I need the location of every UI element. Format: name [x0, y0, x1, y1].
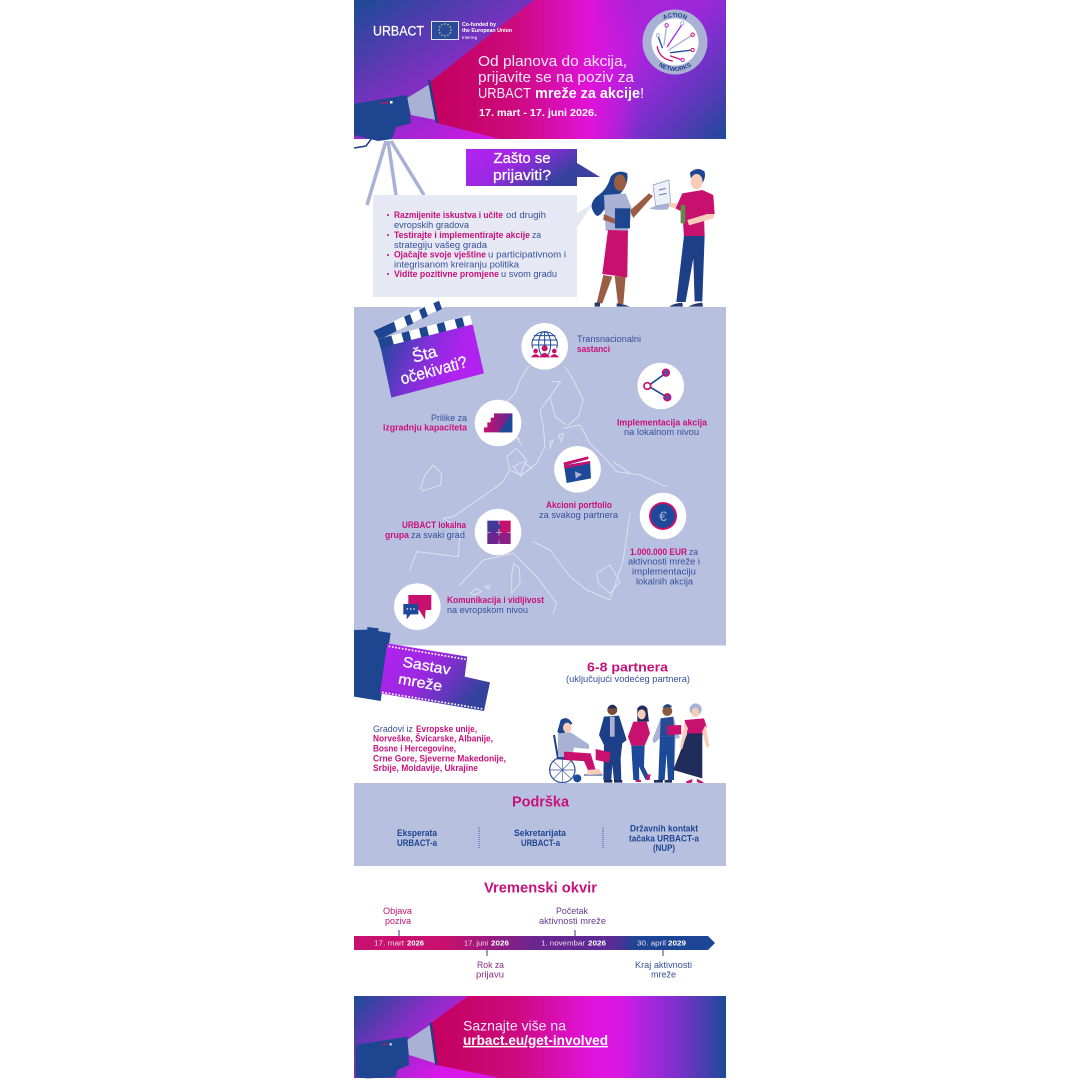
date: 1 November 2026: 1. novembar: [541, 938, 586, 947]
support: secretariat: [514, 828, 567, 848]
support: national contact points: Državnih kontakt: [630, 824, 698, 834]
item: communication: na evropskom nivou: [447, 605, 528, 615]
date: 17 June 2026: [464, 938, 509, 947]
support: experts: URBACT-a: [397, 838, 438, 848]
header title: prijavite se na poziv za: [478, 69, 635, 86]
reasons list: u participativnom i: [488, 250, 566, 260]
icon: stairs: [475, 400, 521, 446]
item: local group: grupa: [385, 530, 410, 540]
EU flag and co-funded text: [432, 22, 512, 40]
timeline bar: [354, 936, 715, 950]
milestone: network start: [539, 906, 606, 926]
icon: speech bubbles: [394, 583, 441, 630]
milestone: call launch: Objava: [383, 906, 412, 916]
eligible cities text: Evropske unije,: [416, 724, 477, 734]
heading: clapperboard: Šta: [410, 342, 440, 367]
item: transnational meetings: [521, 323, 641, 370]
milestone: deadline: prijavu: [476, 970, 504, 980]
date: 30 April 2029: [637, 938, 686, 947]
item: budget: implementaciju: [632, 566, 696, 576]
EU flag and co-funded text: Interreg: [462, 35, 477, 40]
item: capacity building: [383, 400, 521, 446]
map of Europe: [410, 367, 667, 613]
icon: euro coin: €: [659, 508, 667, 524]
eligible cities text: [373, 724, 506, 773]
date: 17 March 2026: 17. mart: [374, 938, 405, 947]
date: 1 November 2026: [541, 938, 606, 947]
date: 30 April 2029: 2029: [668, 938, 686, 947]
heading: why apply: prijaviti?: [493, 167, 551, 184]
reasons list: Razmijenite iskustva i učite: [394, 210, 503, 220]
support: secretariat: Sekretarijata: [514, 828, 567, 838]
reasons list: Testirajte i implementirajte akcije: [394, 230, 530, 240]
header title: !: [640, 85, 644, 102]
header title: mreže za akcije: [535, 85, 640, 102]
EU flag and co-funded text: the European Union: [462, 28, 512, 34]
item: implementation of actions: [617, 363, 708, 437]
item: action portfolio: Akcioni portfolio: [546, 500, 612, 510]
URBACT logo: URBACT: [373, 22, 424, 38]
heading: film roll: mreže: [397, 672, 443, 695]
call to action text: [463, 1018, 608, 1048]
icon: globe with people: [521, 323, 568, 370]
milestone: network end: Kraj aktivnosti: [635, 960, 692, 970]
reasons list: strategiju vašeg grada: [394, 240, 487, 250]
item: implementation of actions: Implementacija akcija: [617, 418, 708, 428]
header banner: [354, 0, 726, 139]
illustration: two people with document: [592, 169, 715, 307]
heading: why apply: Zašto se: [494, 150, 550, 167]
header title: URBACT: [478, 85, 531, 102]
spotlight beam: [430, 0, 726, 139]
panel: what to expect: [354, 298, 726, 646]
item: action portfolio: za svakog partnera: [539, 510, 618, 520]
item: action portfolio: [539, 446, 618, 520]
eligible cities text: Crne Gore, Sjeverne Makedonije,: [373, 754, 506, 764]
reasons list: Ojačajte svoje vještine: [394, 250, 486, 260]
milestone: deadline: Rok za: [477, 960, 504, 970]
eligible cities text: Norveške, Švicarske, Albanije,: [373, 733, 493, 744]
item: transnational meetings: sastanci: [577, 344, 610, 354]
support: experts: Eksperata: [397, 828, 438, 838]
item: budget: aktivnosti mreže i: [628, 556, 700, 566]
date: 30 April 2029: 30. april: [637, 938, 666, 947]
item: budget: [628, 493, 700, 586]
illustration: group of five people: [550, 703, 709, 784]
item: budget: za: [689, 547, 698, 557]
panel: support: [354, 783, 726, 866]
milestone: deadline: [476, 960, 504, 980]
support: national contact points: [629, 824, 700, 853]
heading: film roll: Sastav: [401, 655, 452, 679]
item: communication: Komunikacija i vidljivost: [447, 595, 544, 605]
heading: timeline: Vremenski okvir: [484, 880, 597, 897]
reasons list: integrisanom kreiranju politika: [394, 260, 519, 270]
milestone: network start: aktivnosti mreže: [539, 916, 606, 926]
call to action text: Saznajte više na: [463, 1018, 566, 1034]
header title: Od planova do akcija,: [478, 53, 627, 70]
spotlight beam: [431, 996, 640, 1078]
item: communication: [394, 583, 544, 630]
date: 17 June 2026: 17. juni: [464, 938, 488, 947]
partners count: [566, 660, 690, 684]
support: national contact points: (NUP): [653, 843, 675, 853]
header title: [478, 53, 644, 102]
partners count: (uključujući vodećeg partnera): [566, 674, 690, 684]
icon: small clapperboard: [554, 446, 601, 493]
item: local group: URBACT lokalna: [402, 520, 467, 530]
icon: film camera: [356, 1023, 436, 1078]
item: capacity building: Prilike za: [431, 413, 467, 423]
badge: action networks: [642, 10, 708, 74]
date: 17 March 2026: [374, 938, 424, 947]
reasons list: za: [532, 230, 541, 240]
date: 17 March 2026: 2026: [407, 938, 424, 947]
header dates: 17. mart - 17. juni 2026.: [479, 107, 597, 119]
item: transnational meetings: Transnacionalni: [577, 334, 641, 344]
icon: puzzle: [475, 509, 521, 555]
date: 1 November 2026: 2026: [588, 938, 606, 947]
milestone: network end: mreže: [651, 970, 676, 980]
icon: share nodes: [637, 363, 684, 409]
reasons list: evropskih gradova: [394, 220, 469, 230]
milestone: call launch: [383, 906, 412, 926]
item: local group: za svaki grad: [411, 530, 465, 540]
reasons list: od drugih: [506, 210, 546, 220]
support: national contact points: tačaka URBACT-a: [629, 834, 700, 844]
support: secretariat: URBACT-a: [521, 838, 561, 848]
item: local group: [385, 509, 521, 555]
heading: support: Podrška: [512, 794, 570, 811]
milestone: call launch: poziva: [385, 916, 411, 926]
timeline: [354, 906, 715, 980]
item: implementation of actions: na lokalnom nivou: [624, 427, 699, 437]
EU flag and co-funded text: Co-funded by: [462, 22, 496, 28]
eligible cities text: Srbije, Moldavije, Ukrajine: [373, 763, 478, 773]
item: budget: 1.000.000 EUR: [630, 547, 687, 557]
item: capacity building: izgradnju kapaciteta: [383, 422, 468, 432]
milestone: network start: Početak: [556, 906, 588, 916]
milestone: network end: [635, 960, 692, 980]
reasons list: Vidite pozitivne promjene: [394, 269, 499, 279]
item: budget: lokalnih akcija: [636, 576, 693, 586]
reasons list: [373, 195, 594, 297]
heading: clapperboard: [373, 298, 484, 398]
call to action text: urbact.eu/get-involved: [463, 1032, 608, 1048]
icon: film camera on tripod: [354, 80, 437, 205]
badge: action networks: NETWORKS: [658, 62, 691, 71]
partners count: 6-8 partnera: [587, 660, 669, 674]
panel: why apply: [373, 149, 600, 297]
footer banner: [354, 996, 726, 1078]
heading: clapperboard: očekivati?: [398, 352, 469, 388]
heading: why apply: [466, 149, 600, 186]
support: experts: [397, 828, 438, 848]
reasons list: u svom gradu: [501, 269, 557, 279]
eligible cities text: Gradovi iz: [373, 724, 413, 734]
badge: action networks: ACTION: [664, 12, 688, 20]
heading: film roll: [354, 627, 490, 711]
date: 17 June 2026: 2026: [491, 938, 509, 947]
eligible cities text: Bosne i Hercegovine,: [373, 744, 456, 754]
